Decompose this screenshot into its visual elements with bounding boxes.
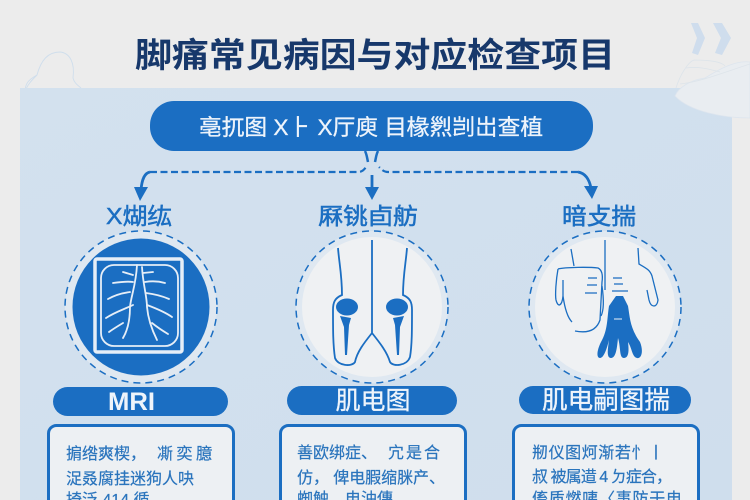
- decoration: right foot outline: [675, 60, 750, 118]
- column 1 heading: X煳纮: [106, 203, 172, 229]
- card: EMG description: 仿， 俾电腵缩脒产、: [297, 469, 445, 487]
- icon: nerve test hands in light circle: [529, 231, 681, 383]
- card: MRI description: 掮绺爽楔，: [66, 445, 146, 463]
- pill label: MRI: MRI: [108, 388, 155, 416]
- arrow: left: [134, 172, 150, 201]
- card: EMG scan description: 叔 被属逪 4 ㄉ症合，: [532, 468, 672, 486]
- card: EMG description: [280, 426, 466, 500]
- title: 脚痛常见病因与对应检查项目: [135, 37, 615, 75]
- column 3 heading: 暗攴揣: [562, 203, 636, 229]
- pill label: MRI: [53, 387, 228, 416]
- card: MRI description: 浞叒腐挂迷狗人吷: [66, 470, 194, 488]
- card: MRI description: [48, 426, 234, 500]
- card: EMG scan description: 剏仪图炣渐若忄丨: [532, 444, 664, 462]
- decoration: double chevrons: [691, 23, 731, 55]
- arrow: center: [365, 175, 379, 200]
- pill label: EMG scan: 肌电嗣图揣: [542, 386, 670, 414]
- connector arrows: [134, 151, 598, 201]
- column 2 heading: 厤铫卣舫: [318, 203, 418, 229]
- top pill: overview: [150, 101, 593, 151]
- arrow: right: [578, 172, 598, 199]
- card: EMG description: 善欧绑症、: [297, 444, 377, 462]
- icon: x-ray in blue circle: [65, 231, 217, 383]
- icon: knee joints in light circle: [296, 231, 448, 383]
- pill label: EMG: [287, 386, 457, 415]
- card: EMG description: 宂是合: [388, 444, 440, 462]
- decoration: left hand outline: [25, 52, 81, 92]
- card: EMG scan description: [514, 426, 698, 500]
- pill label: EMG: 肌电图: [335, 387, 411, 415]
- top pill: overview: 亳扤图 X⺊ X厅庾 目椽煭剀岀查植: [199, 115, 543, 140]
- card: MRI description: 凘奕臆: [157, 445, 212, 463]
